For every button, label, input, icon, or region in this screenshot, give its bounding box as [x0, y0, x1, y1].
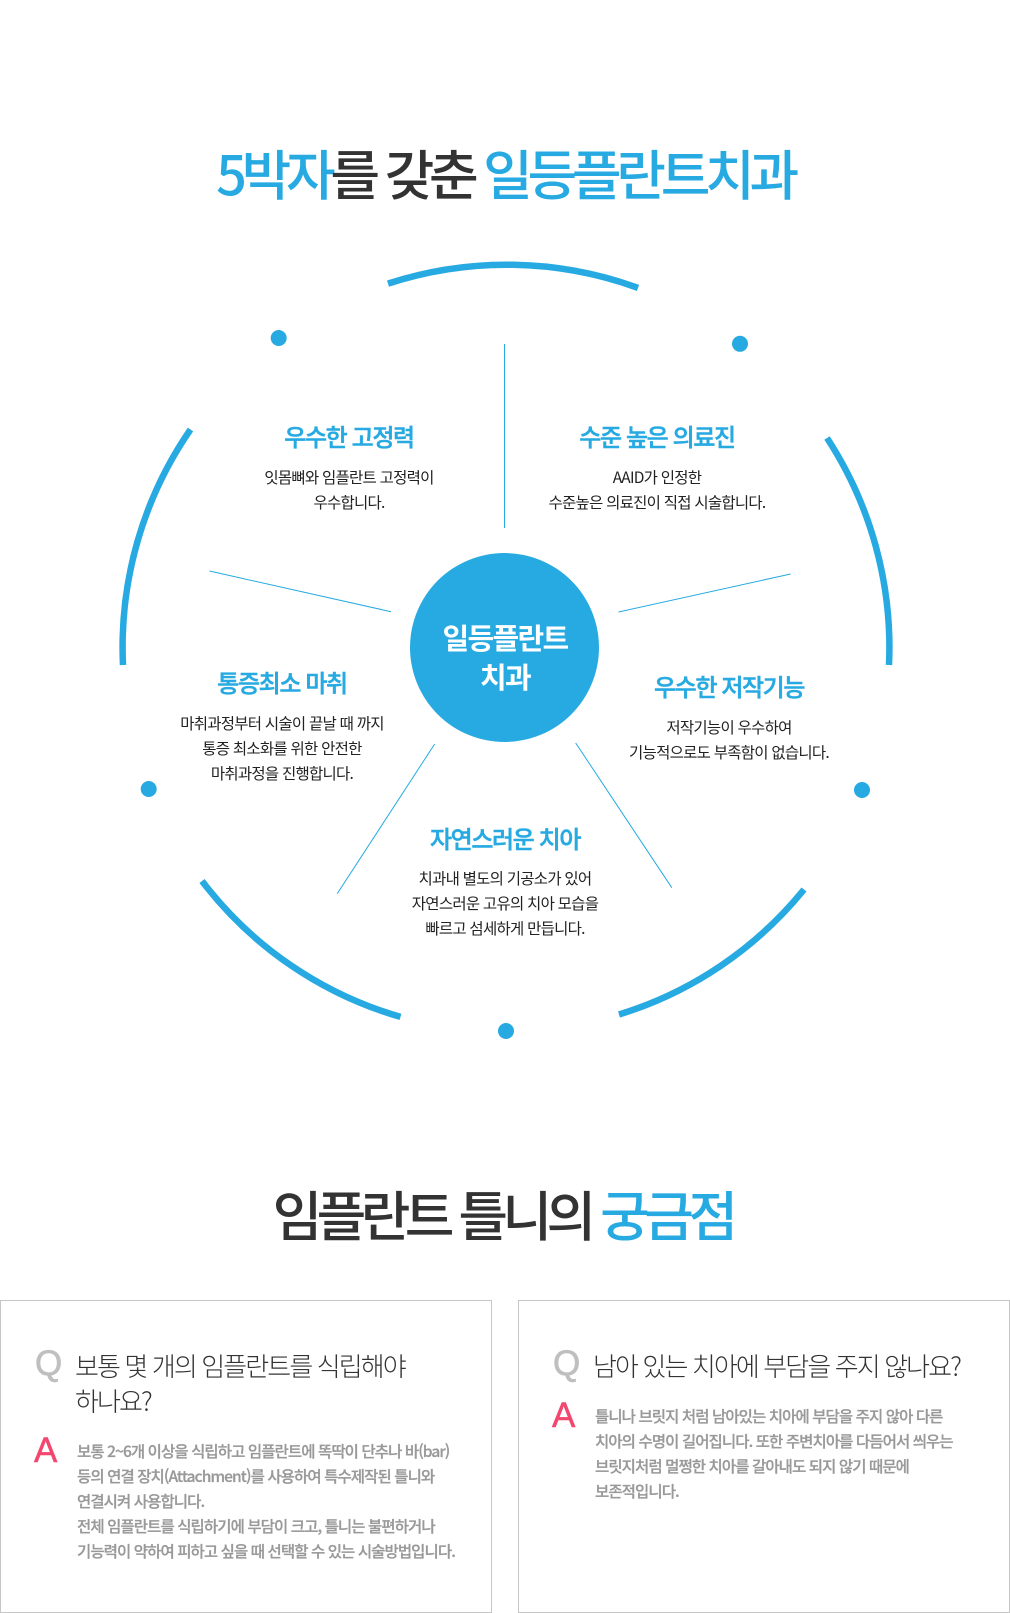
- heading: 수준 높은 의료진: [579, 418, 735, 453]
- question: 남아 있는 치아에 부담을 주지 않나요?: [593, 1346, 960, 1384]
- arc: left: [123, 430, 190, 665]
- text block: 기능적으로도 부족함이 없습니다.: [629, 740, 829, 762]
- text block: [180, 712, 384, 784]
- text block: [629, 716, 829, 762]
- text block: 자연스러운 고유의 치아 모습을: [412, 892, 598, 914]
- answer: [77, 1440, 455, 1562]
- text block: [412, 867, 598, 939]
- text block: 잇몸뼈와 임플란트 고정력이: [264, 466, 434, 488]
- diagram: five-part ring: [119, 262, 893, 1039]
- dot: upper left: [271, 330, 287, 346]
- text block: 수준높은 의료진이 직접 시술합니다.: [548, 491, 766, 513]
- icon: A: A: [34, 1431, 57, 1470]
- text block: 마취과정부터 시술이 끝날 때 까지: [180, 712, 384, 734]
- panel: 우수한 고정력: [264, 418, 434, 513]
- heading: 우수한 저작기능: [654, 668, 804, 703]
- question: [75, 1346, 406, 1419]
- panel: 통증최소 마취: [180, 664, 384, 784]
- question: 보통 몇 개의 임플란트를 식립해야: [75, 1346, 405, 1384]
- text block: 통증 최소화를 위한 안전한: [202, 736, 362, 758]
- text block: [548, 466, 766, 513]
- heading: 우수한 고정력: [284, 418, 414, 453]
- center label: 일등플란트: [443, 616, 567, 658]
- text block: 치과내 별도의 기공소가 있어: [419, 867, 591, 889]
- text block: 저작기능이 우수하여: [666, 716, 792, 738]
- title: 임플란트 틀니의 궁금점: 임플란트 틀니의 궁금점: [273, 1173, 732, 1252]
- spoke: lower left: [337, 744, 435, 894]
- heading: 자연스러운 치아: [430, 820, 580, 855]
- arc: bottom right: [619, 890, 804, 1014]
- text block: 빠르고 섬세하게 만듭니다.: [425, 917, 585, 939]
- answer: [595, 1405, 954, 1502]
- arc: top: [388, 265, 638, 288]
- text block: 마취과정을 진행합니다.: [211, 762, 353, 784]
- icon: Q: Q: [35, 1344, 62, 1383]
- center label: [443, 616, 568, 697]
- answer: 기능력이 약하여 피하고 싶을 때 선택할 수 있는 시술방법입니다.: [77, 1540, 455, 1562]
- dot: lower left: [141, 781, 157, 797]
- icon: A: A: [552, 1396, 575, 1435]
- arc: right: [827, 438, 889, 665]
- answer: 보존적입니다.: [595, 1480, 679, 1502]
- panel: 우수한 저작기능: [629, 668, 829, 762]
- spoke: lower right: [576, 743, 672, 888]
- panel: FAQ 1: [0, 1300, 492, 1613]
- title: 5박자를 갖춘 일등플란트치과: 5박자를 갖춘 일등플란트치과: [216, 132, 794, 211]
- answer: 등의 연결 장치(Attachment)를 사용하여 특수제작된 틀니와: [77, 1465, 434, 1487]
- panel: 수준 높은 의료진: [548, 418, 766, 513]
- heading: 통증최소 마취: [217, 664, 347, 699]
- question: 하나요?: [75, 1382, 151, 1419]
- icon: Q: Q: [553, 1344, 580, 1383]
- panel: FAQ 2: [518, 1300, 1010, 1613]
- panel: 자연스러운 치아: [412, 820, 598, 939]
- text block: AAID가 인정한: [613, 466, 701, 488]
- answer: 보통 2~6개 이상을 식립하고 임플란트에 똑딱이 단추나 바(bar): [77, 1440, 449, 1462]
- answer: 틀니나 브릿지 처럼 남아있는 치아에 부담을 주지 않아 다른: [595, 1405, 943, 1427]
- center circle: [410, 553, 599, 742]
- dot: bottom: [498, 1023, 514, 1039]
- spoke: right: [619, 574, 791, 612]
- dot: upper right: [732, 336, 748, 352]
- answer: 연결시켜 사용합니다.: [77, 1490, 204, 1512]
- spoke: left: [210, 571, 391, 612]
- spoke: top: [504, 344, 506, 528]
- text block: 우수합니다.: [313, 491, 385, 513]
- text block: [264, 466, 434, 513]
- center label: 치과: [480, 655, 530, 697]
- answer: 전체 임플란트를 식립하기에 부담이 크고, 틀니는 불편하거나: [77, 1515, 435, 1537]
- answer: 치아의 수명이 길어집니다. 또한 주변치아를 다듬어서 씌우는: [595, 1430, 953, 1452]
- arc: bottom left: [202, 881, 400, 1017]
- dot: lower right: [854, 782, 870, 798]
- answer: 브릿지처럼 멀쩡한 치아를 갈아내도 되지 않기 때문에: [595, 1455, 909, 1477]
